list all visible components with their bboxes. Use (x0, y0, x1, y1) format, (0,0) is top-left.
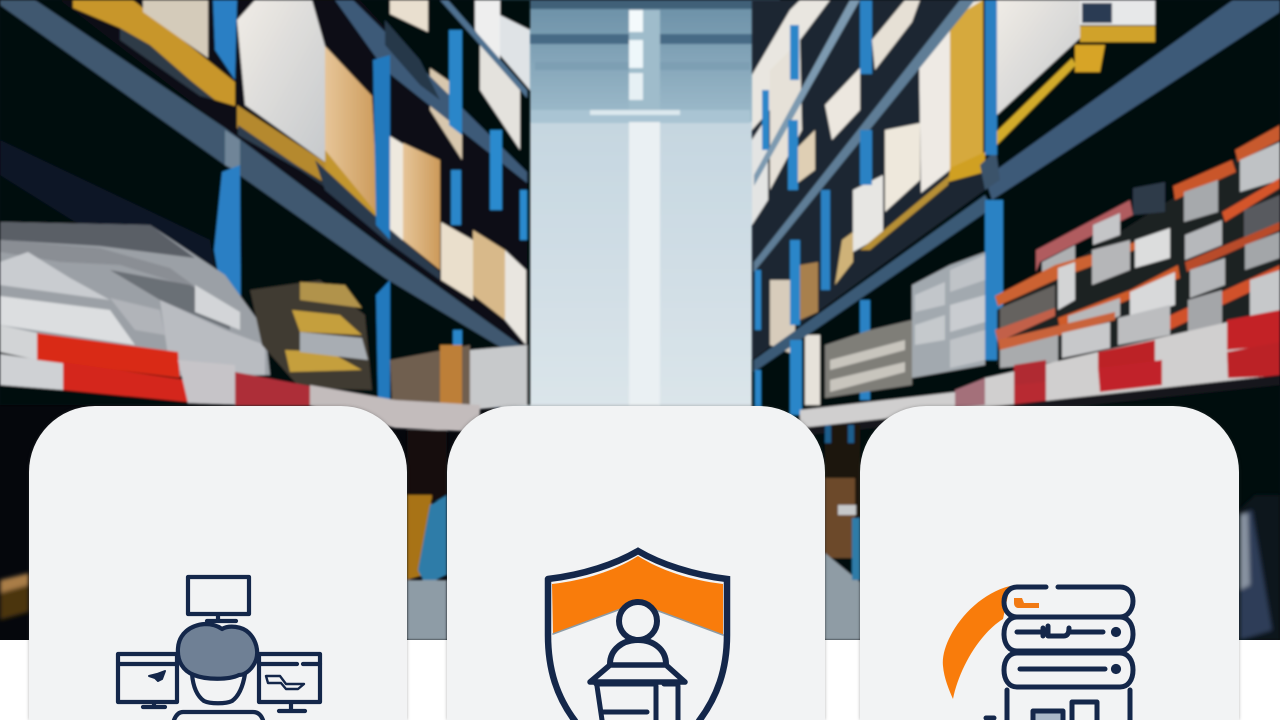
floor-level area between cards (825, 425, 860, 555)
red and white shelf-edge pallets (800, 310, 1280, 430)
icon: operator with three monitors (116, 574, 322, 720)
upper cargo (752, 0, 830, 130)
icon: server stack with orange arc (942, 584, 1136, 720)
blue uprights (985, 0, 997, 155)
red pallets and white shelf (0, 325, 37, 360)
card: left, remote operator (29, 406, 407, 720)
edge strips beside outer cards (0, 495, 1280, 640)
gray stacks (912, 252, 985, 378)
back wall and ceiling (500, 0, 780, 410)
big wrapped pallet upper right (995, 0, 1080, 115)
beams (985, 0, 1280, 200)
lower cargo stacks (0, 222, 270, 378)
orange-topped crates (997, 130, 1280, 365)
beams (0, 0, 527, 363)
icon: shield with person (544, 547, 730, 720)
left racking (0, 0, 530, 640)
right racking (752, 0, 1280, 640)
card: right, storage stack (860, 406, 1239, 720)
blue uprights (213, 0, 237, 80)
top row cargo (73, 0, 235, 106)
card: centre, protected operator (447, 406, 825, 720)
floor-level area between cards (407, 430, 447, 500)
